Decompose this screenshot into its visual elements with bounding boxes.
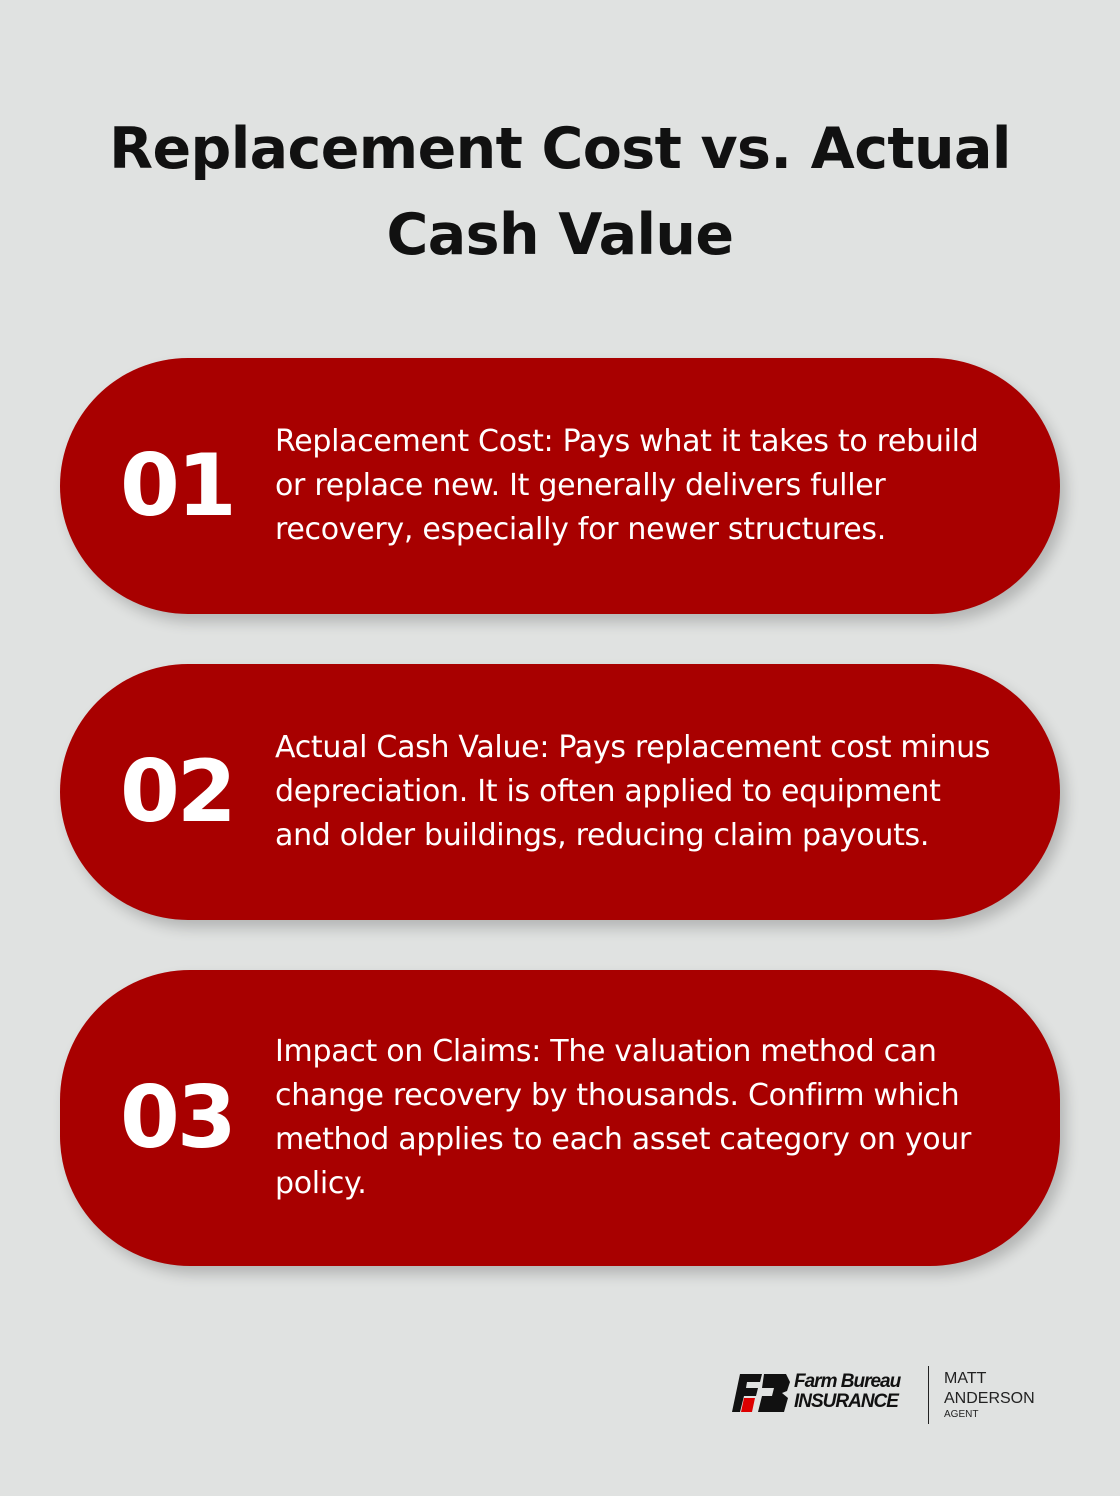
text 02 — [275, 730, 990, 853]
text 03 — [275, 1034, 972, 1201]
number 01: 01 — [120, 436, 234, 536]
text 02: and older buildings, reducing claim payouts. — [275, 818, 929, 853]
text 02: Actual Cash Value: Pays replacement cost minus — [275, 730, 990, 765]
brand text — [794, 1371, 901, 1412]
title: Replacement Cost vs. Actual — [109, 116, 1011, 182]
brand text: Farm Bureau — [794, 1371, 900, 1392]
logo — [732, 1366, 1035, 1424]
agent name: ANDERSON — [944, 1390, 1035, 1407]
icon: FB mark — [732, 1374, 790, 1412]
agent name: MATT — [944, 1370, 986, 1387]
card 02 — [60, 664, 1060, 920]
card 03 — [60, 970, 1060, 1266]
title — [109, 116, 1011, 268]
title: Cash Value — [387, 202, 733, 268]
brand text: INSURANCE — [794, 1391, 898, 1412]
text 03: Impact on Claims: The valuation method can — [275, 1034, 937, 1069]
text 03: method applies to each asset category on your — [275, 1122, 971, 1157]
text 02: depreciation. It is often applied to equipment — [275, 774, 941, 809]
text 03: change recovery by thousands. Confirm which — [275, 1078, 959, 1113]
text 01: recovery, especially for newer structures. — [275, 512, 886, 547]
card 01 — [60, 358, 1060, 614]
text 01 — [275, 424, 978, 547]
text 03: policy. — [275, 1166, 366, 1201]
text 01: Replacement Cost: Pays what it takes to rebuild — [275, 424, 978, 459]
agent name — [944, 1370, 1035, 1420]
number 03: 03 — [120, 1068, 234, 1168]
number 02: 02 — [120, 742, 234, 842]
agent name: AGENT — [944, 1409, 978, 1420]
text 01: or replace new. It generally delivers fuller — [275, 468, 885, 503]
